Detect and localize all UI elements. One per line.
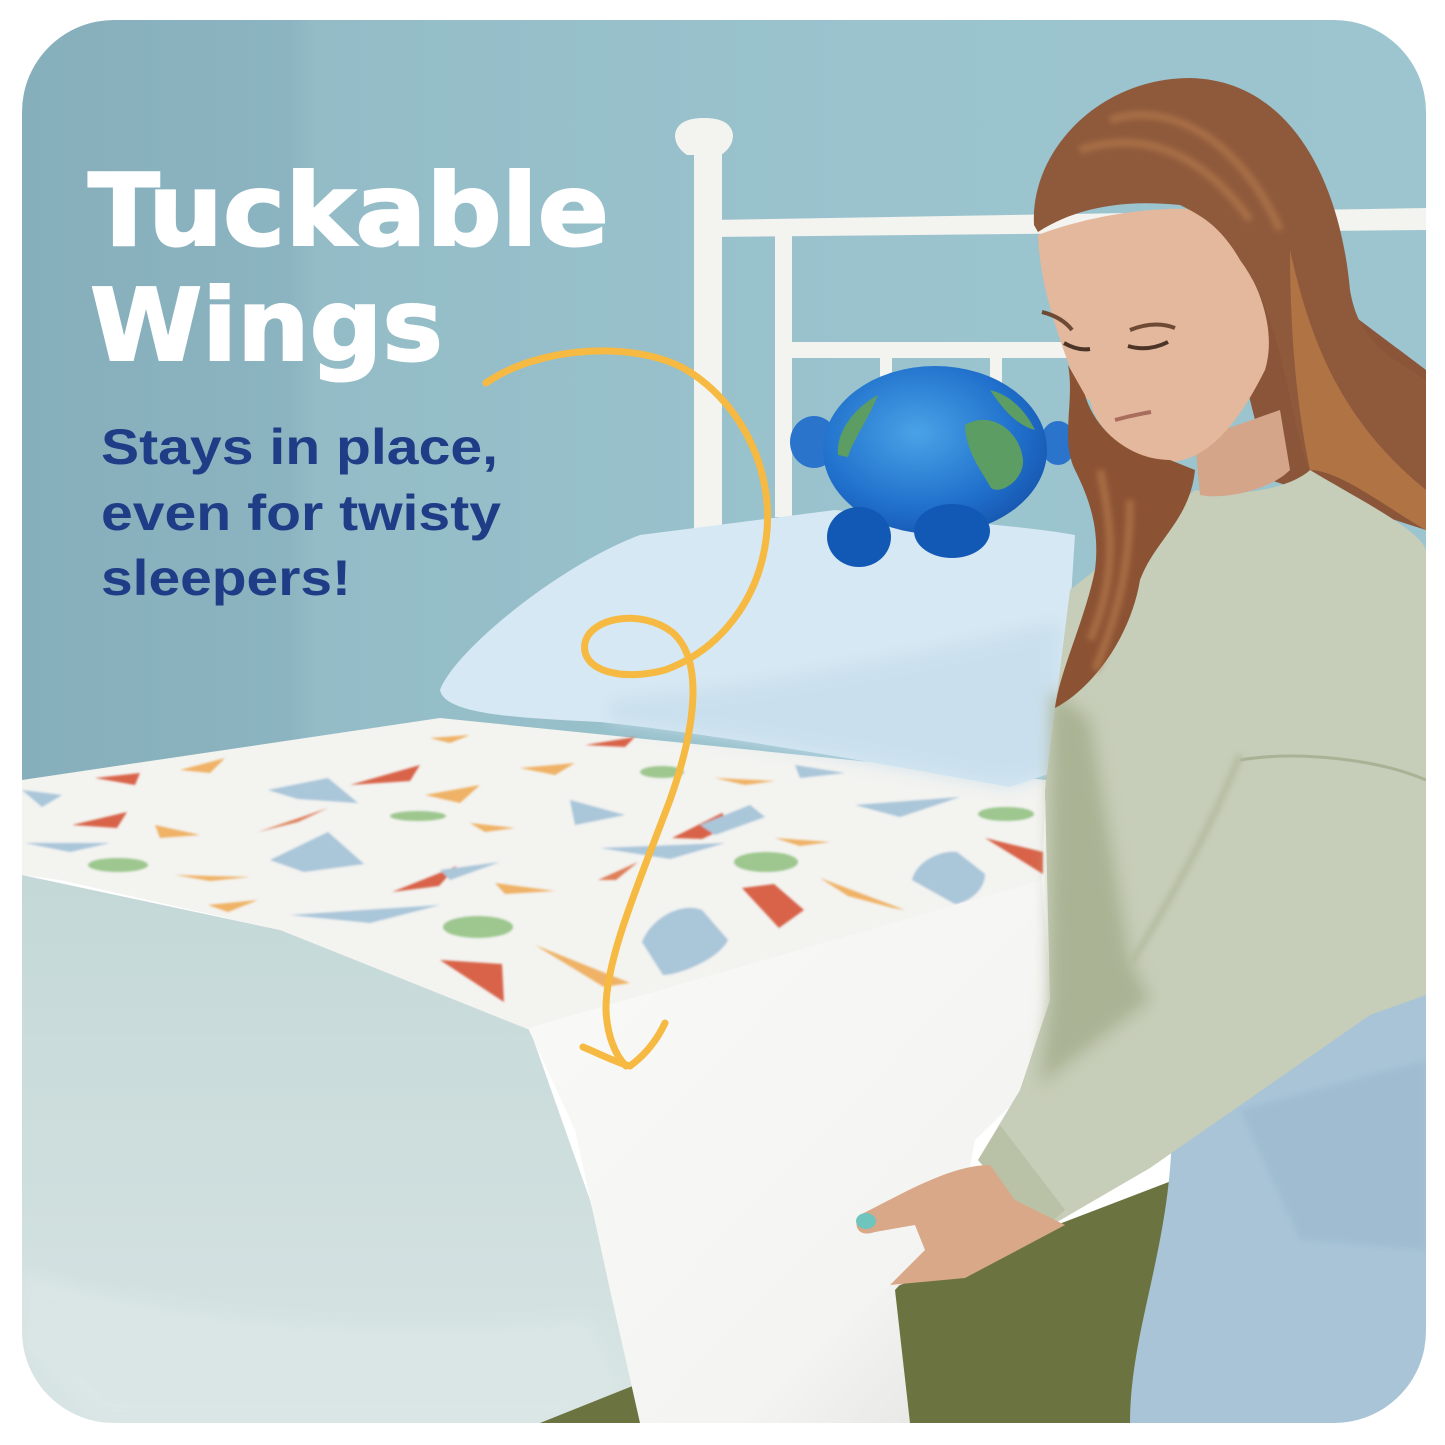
green bed base: [540, 1170, 1200, 1423]
fitted sheet: [22, 875, 640, 1423]
hair: [1034, 78, 1426, 708]
hand: [856, 1165, 1065, 1285]
subtitle: [101, 419, 501, 606]
bed top protector: [22, 718, 1046, 1030]
wall: [22, 20, 1426, 800]
bed frame: [675, 118, 1426, 535]
hair back: [1250, 282, 1426, 530]
title: Wings: [90, 267, 443, 384]
arrow: [486, 351, 768, 1066]
subtitle: Stays in place,: [101, 419, 498, 475]
space print: [22, 735, 1043, 1002]
plush earth: [790, 366, 1076, 567]
pillow: [440, 510, 1075, 787]
white tuck wing: [528, 880, 1052, 1423]
title: Tuckable: [88, 152, 609, 269]
face: [1038, 209, 1269, 462]
jeans: [1130, 980, 1426, 1423]
title: [88, 152, 609, 384]
subtitle: even for twisty: [101, 485, 501, 541]
neck: [1195, 410, 1290, 496]
subtitle: sleepers!: [101, 550, 351, 606]
sweater: [978, 470, 1426, 1232]
